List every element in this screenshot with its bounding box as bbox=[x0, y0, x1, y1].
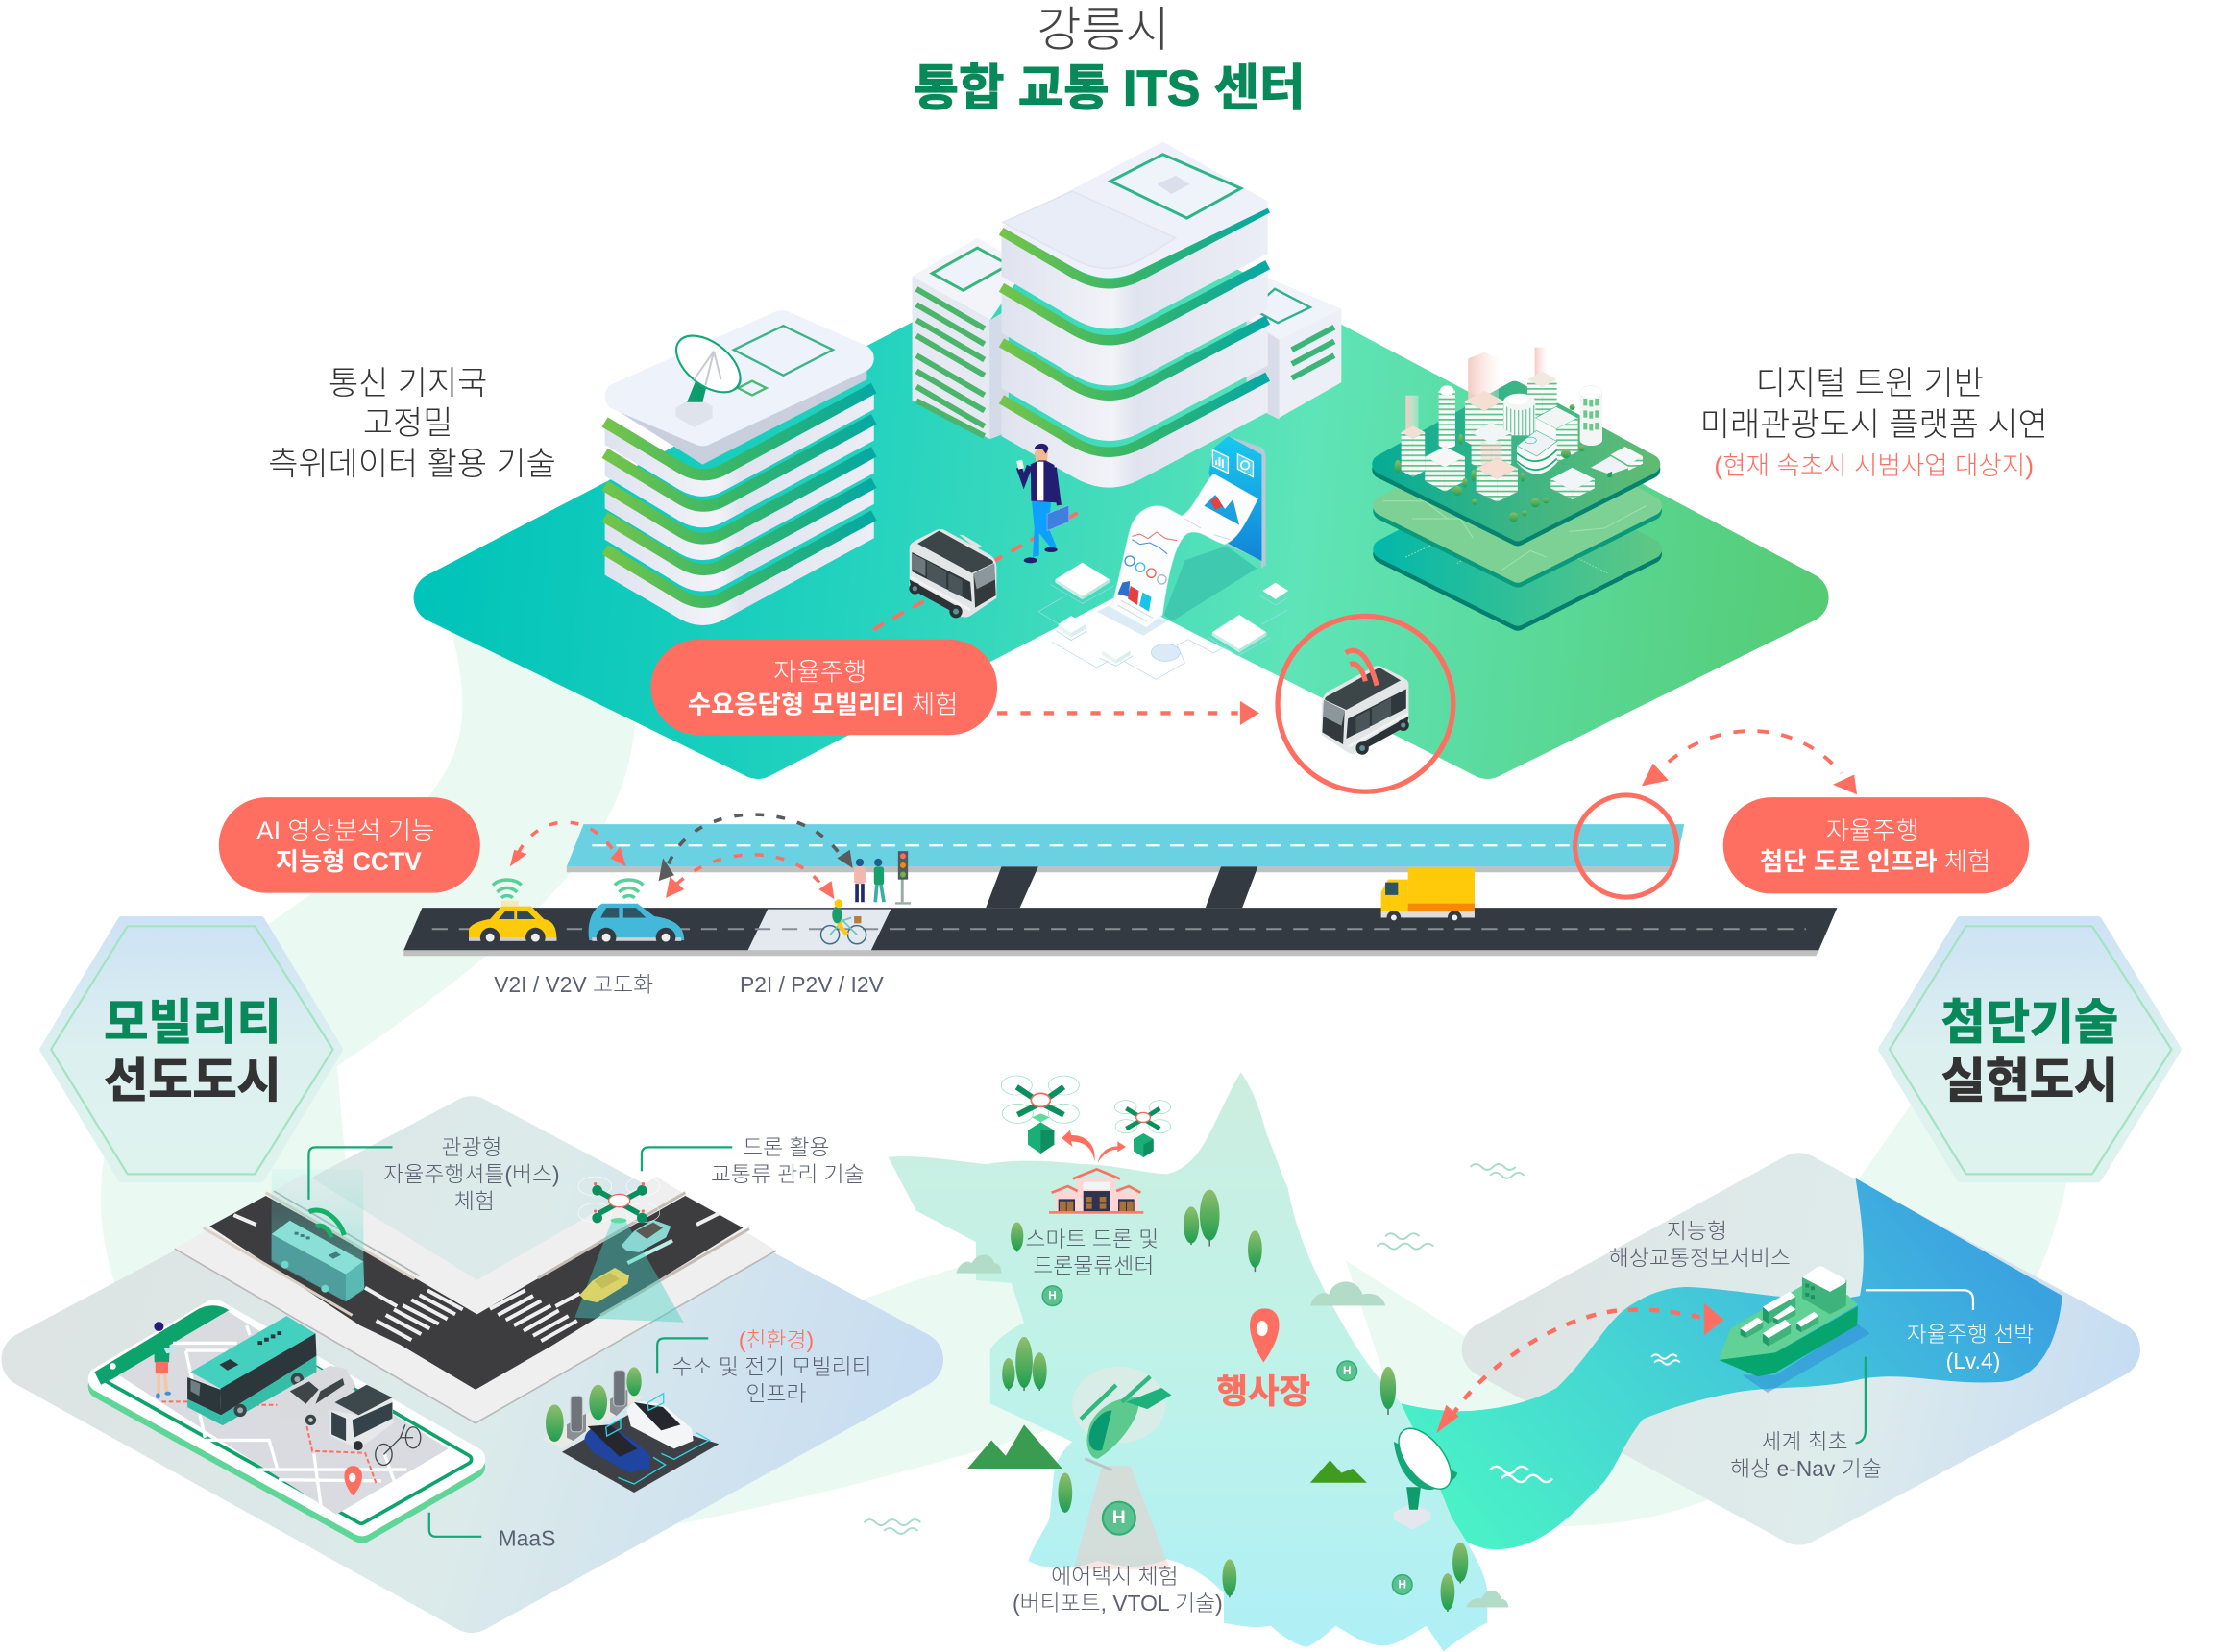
drone 2 bbox=[1114, 1101, 1171, 1157]
truck bbox=[1381, 868, 1475, 925]
callout: AI CCTV: AI 영상분석 기능 bbox=[256, 816, 434, 845]
base station floors bbox=[605, 361, 874, 625]
connectors bbox=[986, 866, 1038, 908]
road labels bbox=[494, 972, 885, 997]
pin bbox=[344, 1466, 362, 1495]
phone body bbox=[101, 1319, 473, 1530]
maritime labels: 해상 e-Nav 기술 bbox=[1730, 1456, 1882, 1481]
road labels: V2I / V2V 고도화 bbox=[494, 972, 653, 997]
mountains bbox=[967, 1424, 1367, 1483]
land labels: 에어택시 체험 bbox=[1051, 1564, 1179, 1589]
panel labels: 관광형 bbox=[441, 1134, 502, 1159]
floor 3 bbox=[1001, 320, 1268, 441]
road section bbox=[403, 824, 1837, 956]
asphalt bbox=[209, 1196, 743, 1390]
label: communication base station: 고정밀 bbox=[363, 405, 452, 442]
bike on phone bbox=[376, 1424, 421, 1465]
leader lines bbox=[1856, 1290, 1973, 1444]
callout: road infrastructure: 자율주행 bbox=[1826, 816, 1919, 845]
maritime labels: 자율주행 선박 bbox=[1907, 1322, 2034, 1347]
pedestrians bbox=[854, 859, 884, 902]
back right block bbox=[1247, 269, 1341, 419]
label: communication base station: 측위데이터 활용 기술 bbox=[268, 447, 556, 483]
land labels bbox=[1013, 1227, 1223, 1616]
hexagon: advanced technology city: 첨단기술 bbox=[1941, 996, 2118, 1050]
infrastructure arc arrow bbox=[1642, 731, 1857, 794]
location pin bbox=[1250, 1308, 1279, 1362]
shadow of paper bbox=[1164, 546, 1257, 621]
hexagon: mobility leading city: 선도도시 bbox=[104, 1054, 281, 1107]
panel labels: MaaS bbox=[499, 1525, 555, 1550]
heliports: H bbox=[1048, 1290, 1057, 1302]
small vent bbox=[738, 381, 767, 395]
delivery arrows bbox=[1062, 1130, 1126, 1163]
callout: demand responsive mobility: 수요응답형 모빌리티 체험 bbox=[688, 691, 958, 719]
label: communication base station: 통신 기지국 bbox=[329, 366, 487, 402]
roof square bbox=[734, 326, 833, 376]
pink beams bbox=[1405, 348, 1547, 430]
panel labels: 체험 bbox=[454, 1188, 495, 1213]
dashed route bbox=[875, 514, 1076, 629]
floor 1 bbox=[1001, 208, 1268, 328]
upper road blue bbox=[567, 824, 1684, 866]
land labels: 스마트 드론 및 bbox=[1025, 1227, 1159, 1251]
drone on road bbox=[578, 1177, 660, 1223]
hexagon: advanced technology city: 실현도시 bbox=[1941, 1054, 2118, 1107]
heliports: H bbox=[1398, 1578, 1406, 1591]
route bbox=[161, 1401, 377, 1484]
panel labels: 인프라 bbox=[745, 1381, 807, 1406]
label: digital twin bbox=[1700, 366, 2048, 480]
ship bbox=[1719, 1266, 1870, 1393]
shuttle on phone bbox=[329, 1385, 393, 1450]
maritime labels: 세계 최초 bbox=[1761, 1429, 1848, 1454]
sea bbox=[1401, 1178, 2062, 1549]
panel labels: 자율주행셔틀(버스) bbox=[383, 1161, 560, 1186]
white car on phone bbox=[278, 1366, 356, 1425]
roof slab bbox=[619, 325, 860, 432]
panel labels: 드론 활용 bbox=[743, 1134, 830, 1159]
main platform bbox=[439, 239, 1803, 753]
cyclist bbox=[820, 899, 866, 944]
background swoosh: pale green ring bbox=[101, 609, 2068, 1527]
pill bbox=[651, 640, 997, 735]
helicopter bbox=[1072, 1367, 1171, 1470]
person with briefcase bbox=[1016, 444, 1069, 563]
panel labels: 수소 및 전기 모빌리티 bbox=[672, 1354, 872, 1379]
beam on bus bbox=[272, 1169, 363, 1301]
helicopter beam bbox=[1074, 1466, 1170, 1569]
dish on roof bbox=[666, 325, 750, 427]
waves bbox=[864, 1164, 1680, 1534]
crosswalk bbox=[748, 910, 891, 950]
land decorations bbox=[864, 1076, 1680, 1616]
big H bbox=[1103, 1502, 1135, 1535]
label: digital twin: 미래관광도시 플랫폼 시연 bbox=[1700, 406, 2048, 443]
paper base bbox=[1097, 602, 1167, 636]
logistics house bbox=[1049, 1169, 1143, 1214]
arc: P2I red bbox=[677, 855, 821, 886]
callout: road infrastructure: 첨단 도로 인프라 체험 bbox=[1760, 847, 1990, 876]
screen map bbox=[118, 1311, 449, 1515]
maritime labels bbox=[1609, 1218, 2034, 1481]
land labels: 드론물류센터 bbox=[1033, 1253, 1154, 1278]
floor 2 bbox=[1001, 265, 1268, 385]
label: digital twin: (현재 속초시 시범사업 대상지) bbox=[1714, 451, 2034, 480]
callout: demand responsive mobility bbox=[651, 640, 997, 735]
city trees bbox=[1395, 404, 1585, 522]
autonomous shuttle bbox=[909, 529, 996, 618]
pavement bbox=[175, 1174, 776, 1423]
maritime labels: 해상교통정보서비스 bbox=[1609, 1245, 1791, 1270]
paper charts bbox=[1117, 495, 1239, 621]
mobile screen bbox=[1208, 436, 1261, 561]
dashed arrow: dish to ship bbox=[1436, 1303, 1723, 1433]
panel labels bbox=[383, 1134, 872, 1550]
title line 2: 통합 교통 ITS 센터 bbox=[913, 60, 1306, 115]
panel labels: (친환경) bbox=[739, 1327, 814, 1352]
plate 3 bbox=[1382, 478, 1652, 621]
floor 4 bbox=[1001, 377, 1268, 488]
title bbox=[913, 3, 1306, 115]
hexagon: mobility leading city: 모빌리티 bbox=[104, 996, 281, 1050]
data paper bbox=[1110, 474, 1257, 627]
intersection bbox=[175, 1169, 776, 1423]
road labels: P2I / P2V / I2V bbox=[740, 972, 885, 997]
screen frame bbox=[1227, 435, 1266, 569]
panel labels: 교통류 관리 기술 bbox=[711, 1161, 865, 1186]
panel: maritime diamond bbox=[1401, 1178, 2111, 1549]
panel base bbox=[30, 1125, 915, 1605]
callout: road infrastructure bbox=[1723, 797, 2029, 893]
arc: V2V dark bbox=[669, 814, 839, 863]
trees bbox=[1002, 1190, 1468, 1612]
blue car bbox=[589, 904, 684, 947]
heliports bbox=[1042, 1286, 1412, 1594]
traffic light bbox=[895, 851, 911, 905]
dish on land bbox=[1389, 1420, 1461, 1529]
screen icons bbox=[1212, 449, 1253, 477]
arc arrowheads bbox=[510, 847, 853, 899]
hexagon: advanced technology city bbox=[1883, 920, 2177, 1178]
wifi on cars bbox=[493, 880, 643, 898]
digital twin platform bbox=[1381, 348, 1652, 621]
road cars bbox=[579, 1220, 671, 1302]
callout: AI CCTV bbox=[219, 797, 480, 893]
data chips, mobile screen, shuttle and person bbox=[875, 435, 1288, 679]
bus on phone bbox=[187, 1316, 316, 1425]
map of Gangneung bbox=[889, 1072, 1487, 1651]
tower buildings bbox=[1402, 372, 1643, 502]
venue label: 행사장 bbox=[1216, 1373, 1310, 1411]
drones, arrows and logistics house bbox=[1001, 1076, 1171, 1214]
leader lines bbox=[308, 1147, 732, 1537]
heliports: H bbox=[1343, 1365, 1351, 1377]
drone beam bbox=[574, 1222, 684, 1323]
white chips bbox=[1055, 563, 1288, 664]
label: digital twin: 디지털 트윈 기반 bbox=[1756, 366, 1984, 402]
highlight circle with shuttle bbox=[1278, 616, 1453, 791]
plate 2 bbox=[1382, 435, 1652, 578]
lower road dark bbox=[403, 908, 1837, 950]
phone and vehicles bbox=[94, 1305, 473, 1530]
title line 1: 강릉시 bbox=[1037, 3, 1170, 57]
maritime labels: (Lv.4) bbox=[1946, 1348, 2000, 1373]
small highlight circle bbox=[1575, 795, 1677, 897]
panel: mobility diamond bbox=[30, 1125, 915, 1605]
maritime labels: 지능형 bbox=[1667, 1218, 1727, 1243]
plate 1 with city bbox=[1381, 348, 1650, 536]
pill text: 자율주행 bbox=[773, 658, 866, 687]
EV charging bbox=[542, 1367, 719, 1493]
building: left communication base station bbox=[605, 325, 874, 625]
crosswalks bbox=[233, 1213, 719, 1341]
label: communication base station bbox=[268, 366, 556, 483]
back left block bbox=[913, 238, 1027, 439]
dashed arrow to shuttle circle bbox=[997, 701, 1259, 725]
circuit lines bbox=[1038, 584, 1287, 679]
callout: AI CCTV: 지능형 CCTV bbox=[276, 847, 422, 876]
curbs bbox=[204, 1191, 749, 1315]
bus on road bbox=[272, 1221, 364, 1301]
land labels: (버티포트, VTOL 기술) bbox=[1013, 1591, 1223, 1616]
building: central ITS center bbox=[913, 141, 1341, 488]
person on phone bbox=[154, 1322, 178, 1398]
drone 1 bbox=[1001, 1076, 1079, 1154]
wifi on bus bbox=[309, 1210, 344, 1237]
taxi bbox=[469, 901, 556, 947]
clouds bbox=[956, 1254, 1508, 1608]
roof bbox=[1001, 141, 1268, 278]
arc: V2I red bbox=[519, 822, 615, 853]
connectivity arcs bbox=[519, 814, 839, 886]
big H: H bbox=[1112, 1508, 1126, 1528]
hexagon: mobility leading city bbox=[44, 920, 338, 1178]
